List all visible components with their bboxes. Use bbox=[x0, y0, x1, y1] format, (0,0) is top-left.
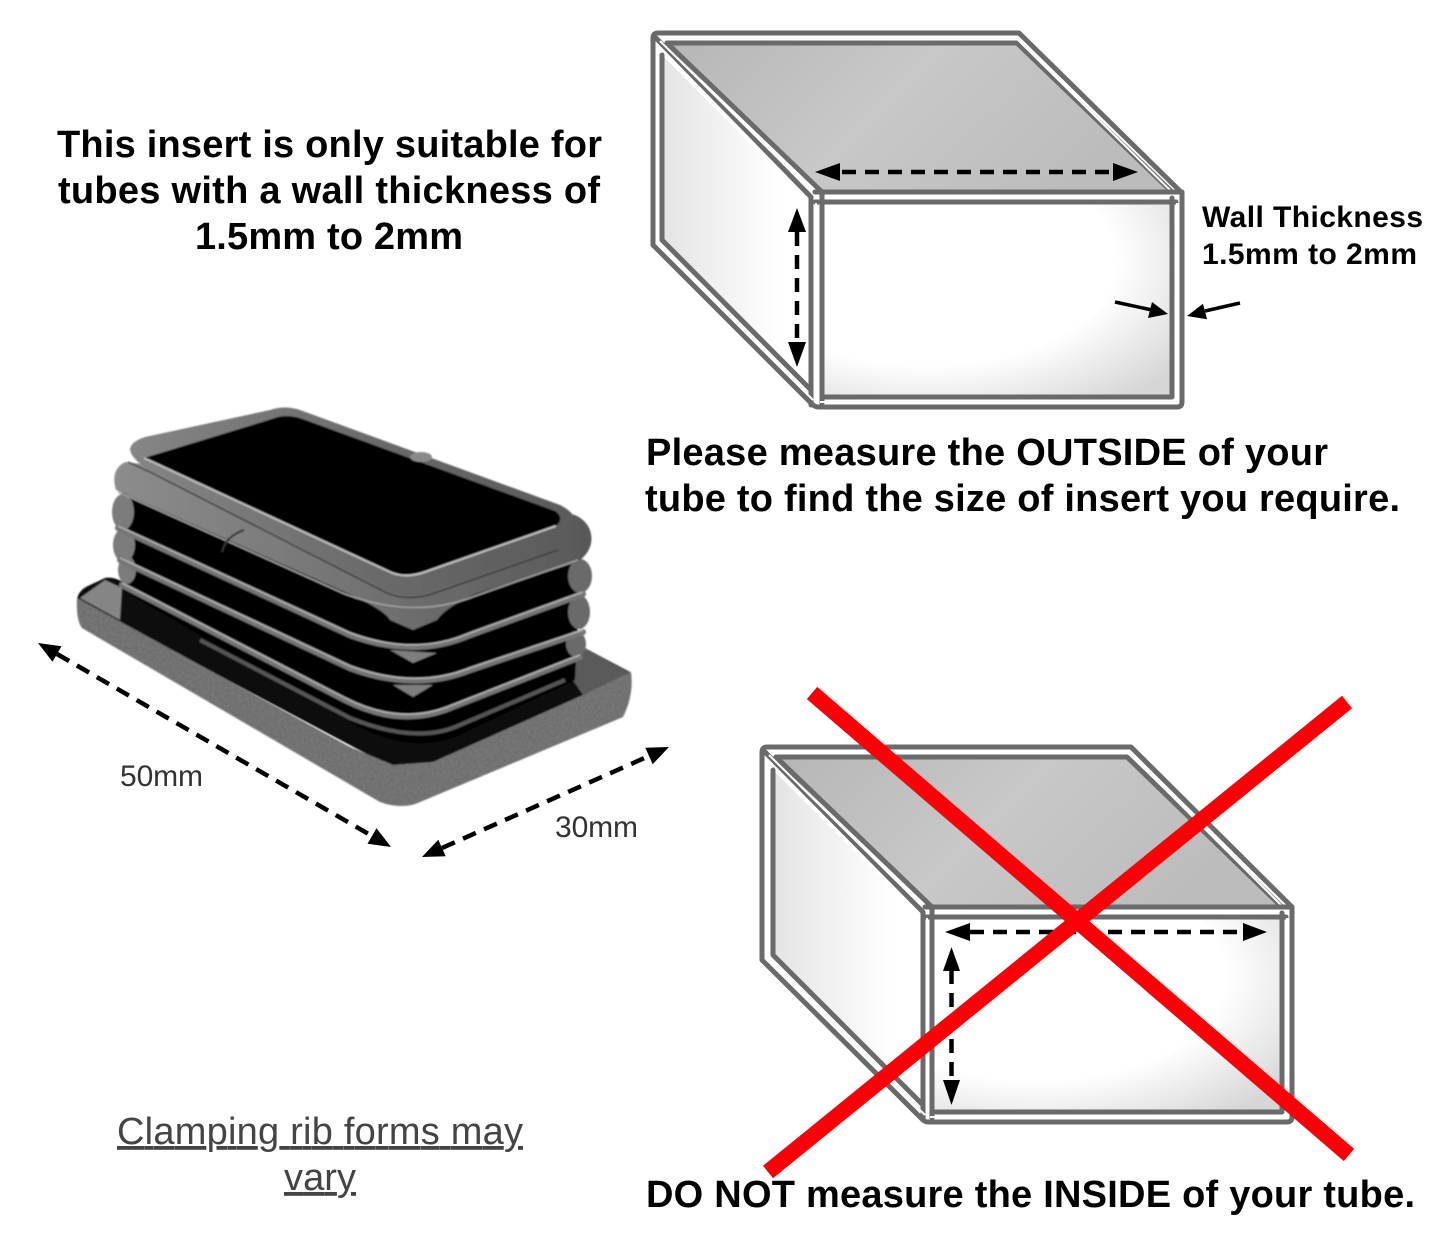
label: 50mm: 50mm bbox=[120, 760, 203, 793]
text: measure the outside: Please measure the OUTSIDE of your bbox=[646, 432, 1328, 474]
arrow: 50mm dimension bbox=[38, 643, 391, 847]
rim and black opening bbox=[130, 408, 576, 596]
rim seam bbox=[222, 530, 244, 552]
arrow: inside height bbox=[943, 947, 960, 1105]
arrow: 30mm dimension bbox=[422, 747, 669, 857]
upper rib bbox=[114, 462, 592, 630]
diagram: correct outside measurement tube bbox=[653, 33, 1240, 407]
heading: wall thickness note: tubes with a wall thickness of bbox=[58, 170, 600, 212]
arrows: wall thickness bbox=[1115, 302, 1240, 319]
rib end blobs bbox=[112, 494, 136, 584]
label: 30mm: 30mm bbox=[555, 811, 638, 844]
flange textured edge bbox=[77, 598, 632, 806]
label: wall thickness bbox=[1202, 201, 1423, 271]
clamping rib lips bbox=[200, 640, 565, 734]
note: clamping rib forms bbox=[117, 1111, 523, 1199]
photo: black plastic tube insert bbox=[77, 408, 632, 806]
label: wall thickness: Wall Thickness bbox=[1202, 201, 1423, 234]
diagram: incorrect inside measurement tube bbox=[762, 747, 1292, 1122]
rim nub bbox=[410, 452, 432, 462]
arrow: inside width bbox=[945, 923, 1267, 941]
flange top surface bbox=[77, 578, 630, 768]
label: wall thickness: 1.5mm to 2mm bbox=[1202, 238, 1417, 271]
heading: wall thickness note bbox=[57, 124, 602, 258]
icon: red cross bbox=[768, 693, 1349, 1172]
note: clamping rib forms: vary bbox=[284, 1157, 356, 1199]
text: measure the outside bbox=[645, 432, 1400, 520]
heading: wall thickness note: 1.5mm to 2mm bbox=[195, 216, 463, 258]
arrow: outside height bbox=[788, 208, 806, 367]
text: measure the outside: tube to find the size of insert you require. bbox=[645, 478, 1400, 520]
note: clamping rib forms: Clamping rib forms may bbox=[117, 1111, 523, 1153]
rib right end blobs bbox=[566, 559, 592, 657]
rib corner highlights bbox=[390, 650, 437, 697]
insert body bbox=[122, 480, 582, 743]
arrow: outside width bbox=[815, 163, 1138, 181]
text: do not measure inside: DO NOT measure the INSIDE of your tube. bbox=[646, 1174, 1415, 1216]
heading: wall thickness note: This insert is only suitable for bbox=[57, 124, 602, 166]
